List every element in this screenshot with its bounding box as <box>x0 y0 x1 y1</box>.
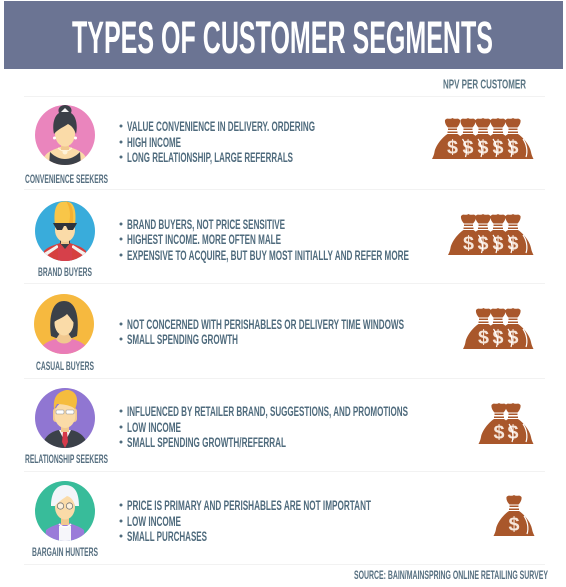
bullet list <box>120 498 371 544</box>
panel: casual buyers <box>34 294 534 373</box>
avatar: convenience seeker <box>35 105 95 165</box>
icon: three money bags <box>463 308 534 349</box>
icon: one money bag <box>494 495 534 536</box>
bullet list: HIGHEST INCOME. MORE OFTEN MALE <box>127 232 281 247</box>
icon: four money bags <box>448 214 534 255</box>
bullet list: LONG RELATIONSHIP, LARGE REFERRALS <box>127 150 293 165</box>
bullet list: VALUE CONVENIENCE IN DELIVERY. ORDERING <box>127 119 315 134</box>
bullet list <box>120 217 409 263</box>
title banner <box>4 1 563 69</box>
bullet list: LOW INCOME <box>127 514 181 529</box>
panel: bargain hunters <box>32 481 534 559</box>
panel: convenience seekers <box>25 105 534 186</box>
bullet list: SMALL SPENDING GROWTH <box>127 332 238 347</box>
bullet list: SMALL SPENDING GROWTH/REFERRAL <box>127 435 286 450</box>
bullet list: HIGH INCOME <box>127 135 181 150</box>
panel: relationship seekers <box>25 388 534 466</box>
bullet list: LOW INCOME <box>127 420 181 435</box>
icon: five money bags <box>432 118 534 159</box>
bullet list <box>120 119 315 165</box>
icon: two money bags <box>478 403 534 444</box>
label: BARGAIN HUNTERS <box>32 545 98 559</box>
label: RELATIONSHIP SEEKERS <box>25 452 108 466</box>
bullet list: SMALL PURCHASES <box>127 529 207 544</box>
bullet list <box>120 404 408 450</box>
avatar: bargain hunter <box>35 481 95 541</box>
label: CASUAL BUYERS <box>36 359 94 373</box>
avatar: brand buyer <box>35 201 95 261</box>
bullet list <box>120 317 404 347</box>
panel: brand buyers <box>35 201 534 279</box>
avatar: casual buyer <box>34 294 94 354</box>
label: CONVENIENCE SEEKERS <box>25 172 108 186</box>
label: BRAND BUYERS <box>38 265 92 279</box>
bullet list: PRICE IS PRIMARY AND PERISHABLES ARE NOT IMPORTANT <box>127 498 371 513</box>
bullet list: BRAND BUYERS, NOT PRICE SENSITIVE <box>127 217 285 232</box>
avatar: relationship seeker <box>35 388 95 448</box>
